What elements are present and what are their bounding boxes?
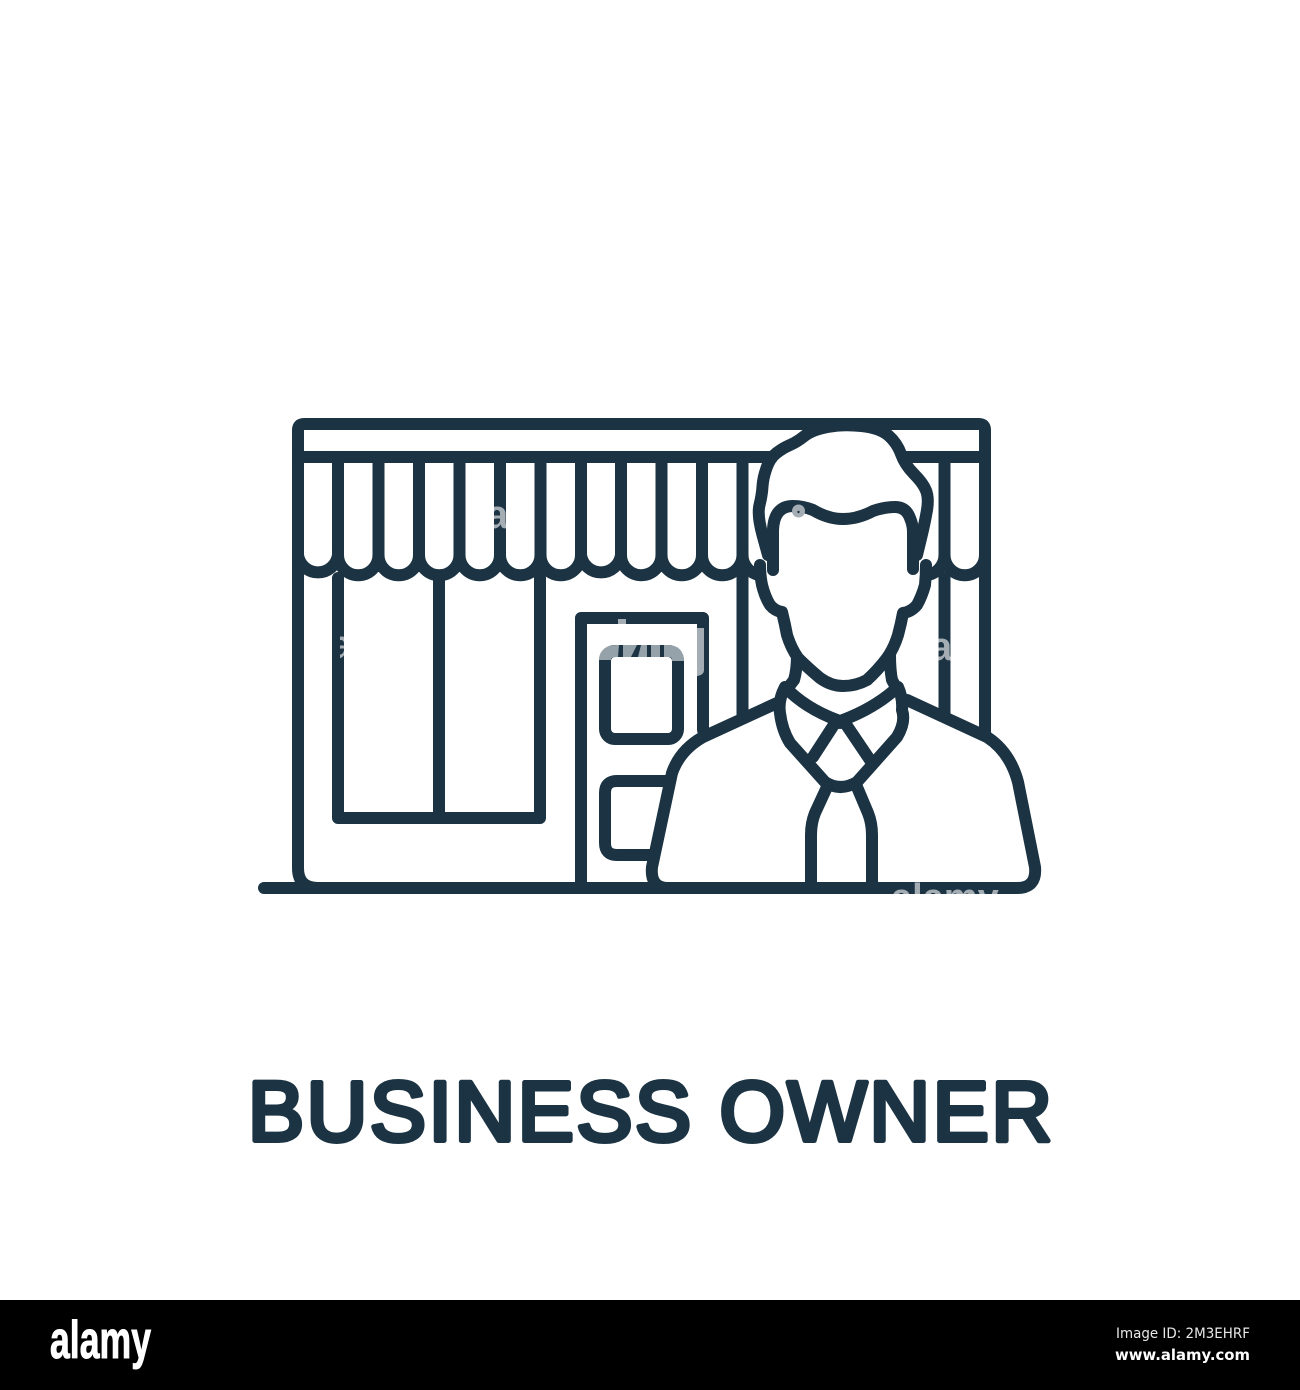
watermark on door pane [605, 645, 678, 661]
icon: tie knot crossing [813, 720, 870, 760]
icon: neck [785, 650, 898, 695]
icon: tie [811, 787, 872, 883]
footer bar [0, 1300, 1300, 1390]
icon: shop door [581, 618, 703, 888]
icon: shop with business owner [264, 424, 1035, 888]
watermark letter on right pillar: a [930, 625, 953, 669]
icon: door upper pane [605, 651, 678, 739]
watermark letter on window: a [330, 623, 353, 667]
watermark fragments [330, 493, 999, 919]
icon: hairline [773, 506, 913, 570]
icon: striped awning [298, 457, 985, 575]
watermark on door frame [618, 619, 704, 676]
watermark ring on hairline [792, 504, 805, 518]
icon: door lower pane [605, 781, 670, 855]
watermark on ground line: alamy [891, 877, 999, 919]
icon: face [760, 565, 926, 686]
footer url: www.alamy.com [1115, 1346, 1250, 1364]
icon: ground line [264, 882, 1017, 894]
footer logo: alamy [50, 1311, 151, 1370]
icon: hair [759, 425, 928, 555]
watermark letter on awning: a [486, 493, 509, 537]
icon: torso and shoulders [652, 700, 1035, 888]
infographic canvas [0, 418, 1300, 1390]
title: BUSINESS OWNER [248, 1064, 1052, 1158]
footer image id: Image ID: 2M3EHRF [1116, 1326, 1250, 1342]
icon: collar [780, 687, 903, 787]
icon: pillars behind person [742, 578, 944, 716]
icon: shop building outline [298, 424, 985, 888]
icon: shop window [338, 578, 540, 818]
icon: neck lines [787, 655, 897, 689]
icon: person [652, 425, 1035, 888]
